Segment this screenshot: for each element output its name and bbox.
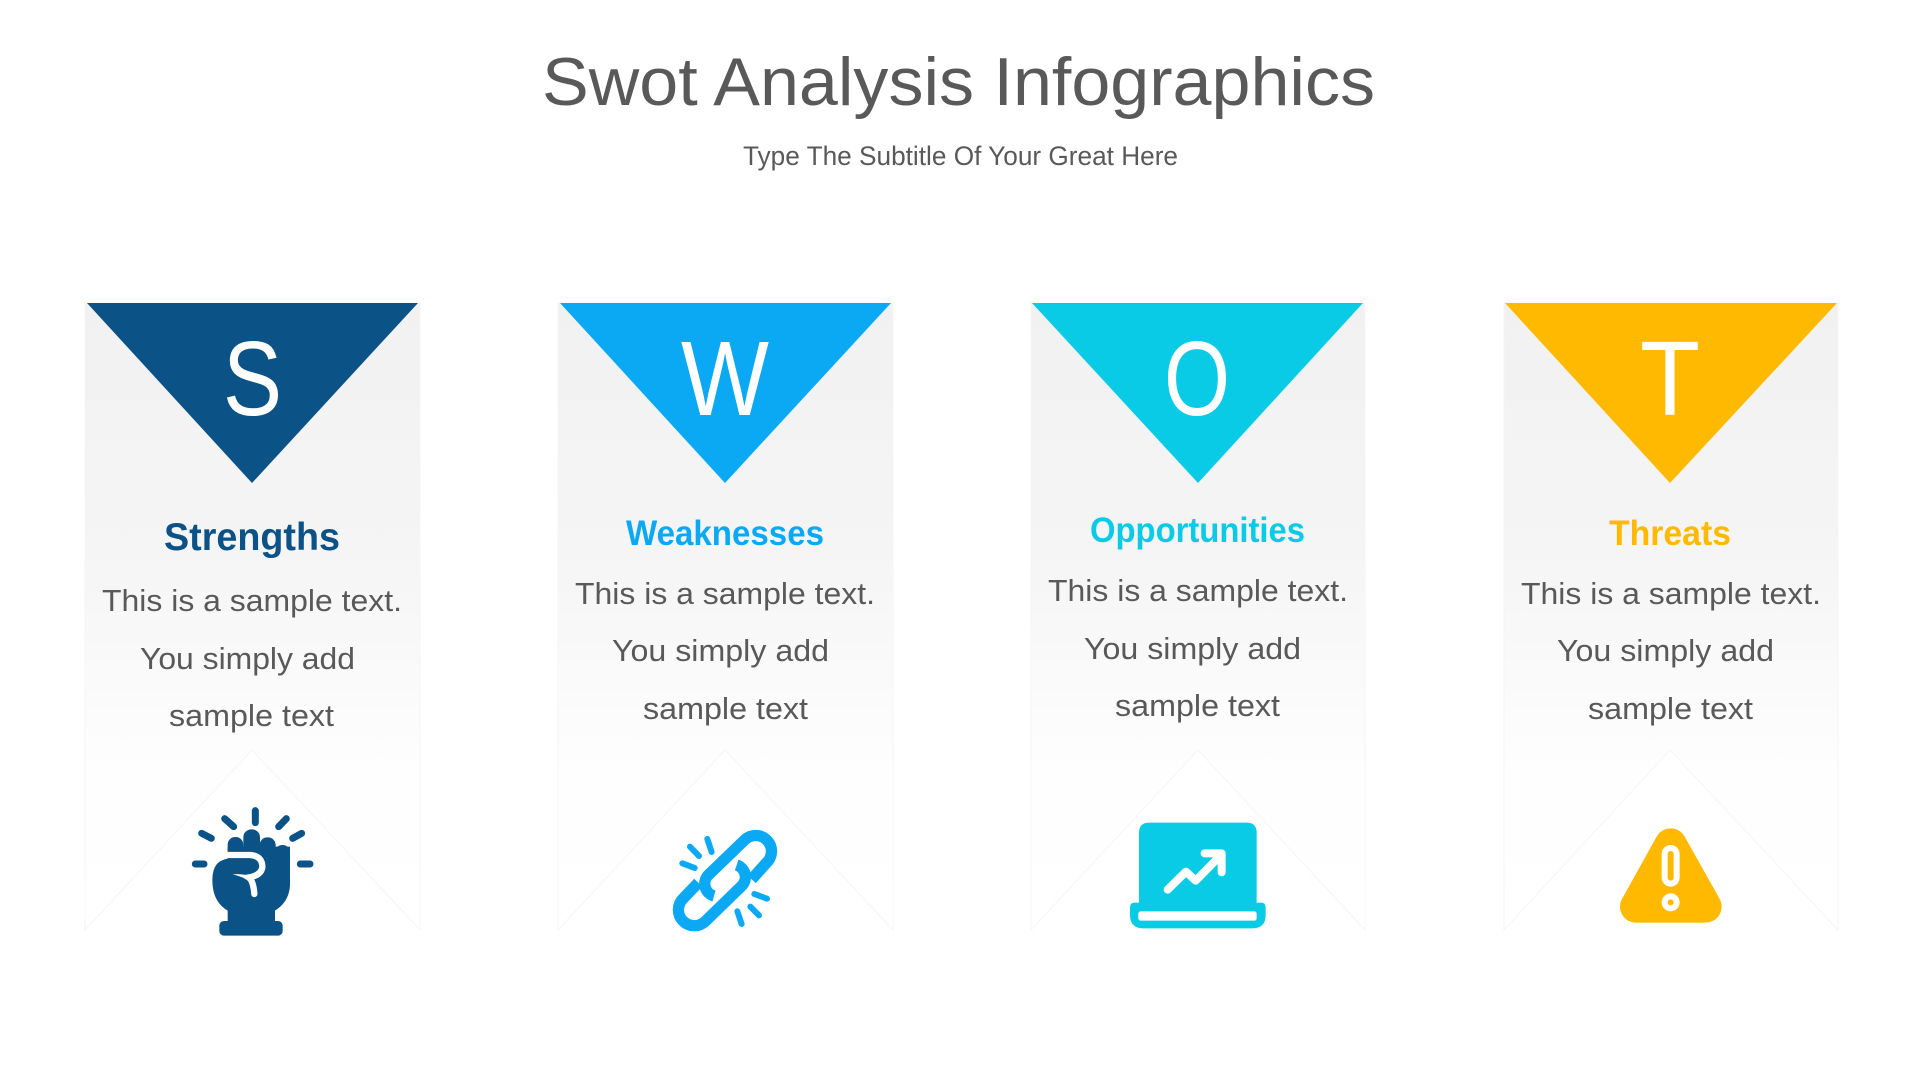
body text: This is a sample text. <box>1521 576 1821 611</box>
heading: Weaknesses: Weaknesses <box>626 514 824 553</box>
heading: Threats: Threats <box>1609 514 1731 553</box>
body text: You simply add <box>1557 633 1774 668</box>
panel background <box>1504 303 1838 930</box>
letter T: T <box>1640 320 1700 438</box>
subtitle: Type The Subtitle Of Your Great Here <box>743 141 1178 171</box>
panel: weaknesses <box>558 303 893 930</box>
title: Swot Analysis Infographics <box>542 44 1375 120</box>
body text: sample text <box>1115 688 1280 723</box>
body text: You simply add <box>140 641 355 676</box>
heading: Opportunities: Opportunities <box>1090 511 1305 550</box>
body text <box>1521 576 1821 726</box>
panel: strengths <box>85 303 420 936</box>
panel: threats <box>1504 303 1838 930</box>
letter S: S <box>223 320 282 438</box>
body text: You simply add <box>1084 631 1301 666</box>
icon: raised fist <box>195 811 310 936</box>
icon: broken chain link <box>678 835 771 926</box>
icon: warning triangle <box>1636 844 1706 908</box>
heading: Strengths: Strengths <box>164 516 340 559</box>
body text <box>575 576 875 726</box>
panel background <box>1031 303 1365 930</box>
body text: sample text <box>1588 691 1753 726</box>
body text: This is a sample text. <box>102 583 402 618</box>
triangle banner T <box>1505 303 1837 483</box>
body text: This is a sample text. <box>575 576 875 611</box>
body text <box>102 583 402 733</box>
triangle banner W <box>560 303 891 483</box>
body text <box>1048 573 1348 723</box>
letter O: O <box>1164 320 1230 438</box>
triangle banner S <box>87 303 418 483</box>
panel: opportunities <box>1031 303 1365 930</box>
body text: sample text <box>643 691 808 726</box>
body text: sample text <box>169 698 334 733</box>
panel background <box>558 303 893 930</box>
panel background <box>85 303 420 930</box>
body text: This is a sample text. <box>1048 573 1348 608</box>
triangle banner O <box>1032 303 1363 483</box>
icon: laptop with growth arrow <box>1130 823 1266 928</box>
body text: You simply add <box>612 633 829 668</box>
letter W: W <box>681 320 769 438</box>
